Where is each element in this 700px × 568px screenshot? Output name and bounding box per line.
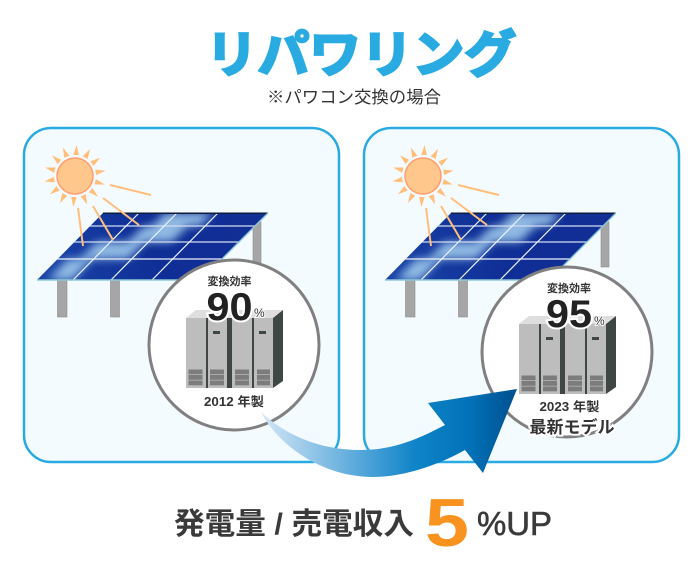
efficiency label: 変換効率 — [547, 281, 591, 295]
year label: 2012 年製 — [204, 394, 265, 409]
percent sign: % — [594, 314, 605, 328]
solar array — [37, 212, 268, 317]
badge circle — [149, 260, 319, 430]
panel: 2012 model — [24, 128, 339, 462]
efficiency badge — [482, 267, 652, 437]
percent up text: %UP — [477, 505, 552, 542]
sun beams — [426, 185, 499, 246]
efficiency badge — [149, 260, 319, 430]
icon: power conditioner — [186, 310, 283, 388]
efficiency value: 90 — [206, 286, 252, 329]
panel background — [364, 128, 679, 462]
panel: 2023 model — [364, 128, 679, 462]
percent sign: % — [254, 306, 265, 320]
result headline — [174, 485, 552, 561]
big number five: 5 — [425, 485, 469, 561]
badge circle — [482, 267, 652, 437]
latest model label: 最新モデル — [530, 417, 614, 437]
icon: sun — [44, 145, 106, 207]
efficiency value: 95 — [546, 293, 592, 336]
solar array — [385, 212, 616, 317]
efficiency label: 変換効率 — [208, 274, 252, 288]
year label: 2023 年製 — [540, 399, 600, 414]
sun beams — [78, 185, 151, 246]
icon: power conditioner — [519, 316, 616, 394]
title: リパワリング — [206, 27, 516, 83]
icon: sun — [392, 145, 454, 207]
revenue text: 発電量 / 売電収入 — [174, 508, 414, 541]
arrow: upgrade — [261, 389, 517, 477]
subtitle note: ※パワコン交換の場合 — [267, 88, 441, 107]
panel background — [24, 128, 339, 462]
